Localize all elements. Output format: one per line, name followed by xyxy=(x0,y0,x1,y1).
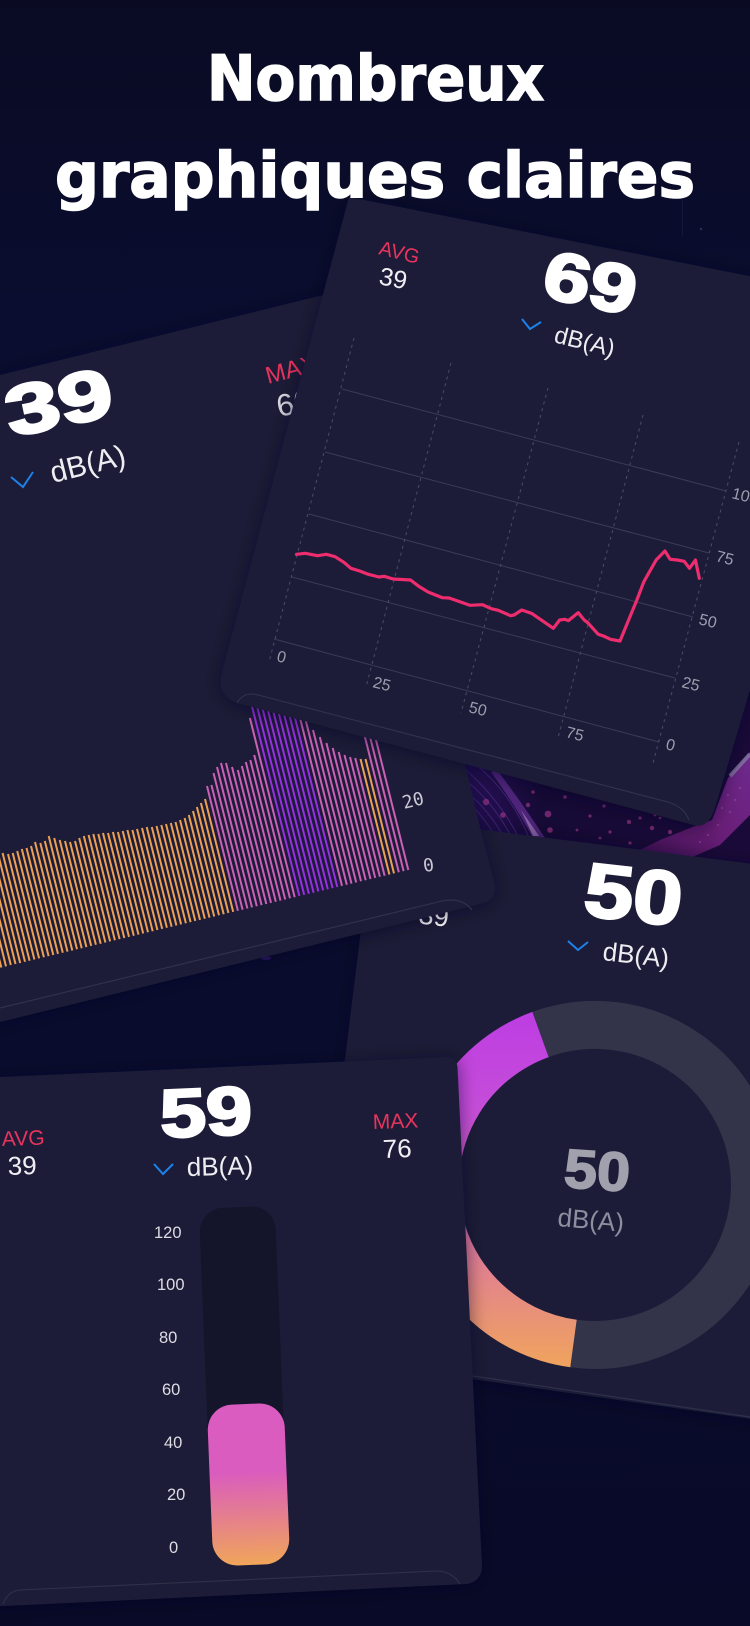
x axis labels: 0 xyxy=(275,648,288,667)
unit: dB(A) xyxy=(552,322,618,363)
unit: dB(A) xyxy=(601,936,671,973)
reading: 50: 50 xyxy=(580,847,687,943)
axis labels xyxy=(400,788,435,877)
card background xyxy=(0,272,495,1027)
icon: chevron xyxy=(11,472,33,487)
bar chart xyxy=(0,700,408,968)
line chart grid xyxy=(269,338,739,763)
panel: line chart card (69) xyxy=(221,197,750,826)
title: graphiques claires xyxy=(55,139,695,212)
scale labels: 0 xyxy=(169,1539,178,1557)
icon: chevron xyxy=(568,941,588,950)
y axis labels xyxy=(664,485,750,755)
max value: 76 xyxy=(382,1133,412,1164)
max value: 66 xyxy=(273,382,314,424)
average value: 39 xyxy=(377,262,409,295)
unit: dB(A) xyxy=(47,439,129,490)
average label: AVG xyxy=(1,1127,45,1151)
icon: chevron xyxy=(154,1164,173,1174)
x axis labels: 75 xyxy=(564,724,586,745)
y axis labels: 0 xyxy=(664,736,677,755)
donut centre value: 50 xyxy=(562,1137,632,1204)
donut chart xyxy=(435,1025,750,1345)
axis labels: 0 xyxy=(422,855,435,877)
title xyxy=(55,42,695,212)
x axis labels xyxy=(275,648,586,745)
level bar xyxy=(199,1206,290,1566)
donut centre unit: dB(A) xyxy=(556,1202,625,1238)
title: Nombreux xyxy=(207,42,544,115)
scale labels: 40 xyxy=(164,1434,182,1452)
clipped average value: 39 xyxy=(417,900,450,933)
unit: dB(A) xyxy=(186,1150,254,1182)
reading: 39: 39 xyxy=(0,353,120,452)
scale labels: 80 xyxy=(159,1329,177,1347)
panel: bar chart card (39) xyxy=(0,272,495,1027)
scale labels: 120 xyxy=(154,1224,182,1242)
card background xyxy=(221,197,750,826)
line series xyxy=(296,551,699,641)
panel: donut gauge card (50) xyxy=(290,816,750,1426)
max label: MAX xyxy=(263,350,320,390)
x axis labels: 25 xyxy=(371,674,393,695)
y axis labels: 25 xyxy=(680,674,702,695)
icon: chevron xyxy=(522,319,541,329)
panel: level bar card (59) xyxy=(0,1057,482,1606)
max label: MAX xyxy=(372,1109,419,1134)
reading: 69: 69 xyxy=(537,236,644,330)
y axis labels: 50 xyxy=(697,611,719,632)
background image: purple particle wave xyxy=(455,700,750,880)
scale labels: 100 xyxy=(157,1276,185,1294)
scale labels xyxy=(154,1224,185,1557)
axis labels: 20 xyxy=(400,788,426,814)
card background xyxy=(0,1057,482,1606)
scale labels: 20 xyxy=(167,1486,185,1504)
reading: 59: 59 xyxy=(158,1073,254,1152)
scale labels: 60 xyxy=(162,1381,180,1399)
background stars xyxy=(261,200,702,960)
average value: 39 xyxy=(7,1150,37,1181)
card background xyxy=(290,816,750,1426)
x axis labels: 50 xyxy=(467,699,489,720)
average label: AVG xyxy=(377,238,422,269)
y axis labels: 75 xyxy=(714,548,736,569)
